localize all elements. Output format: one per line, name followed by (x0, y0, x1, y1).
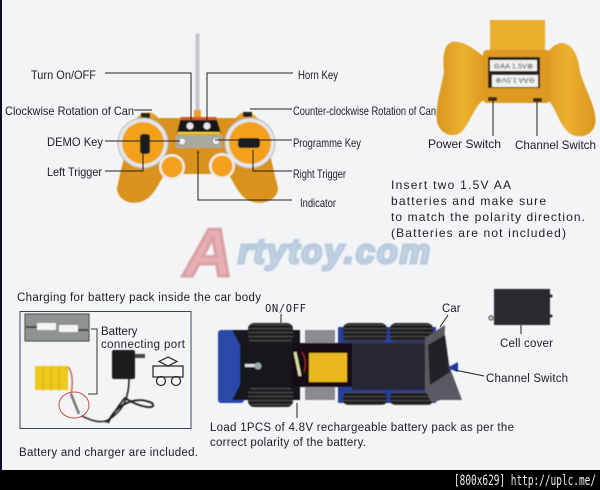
label: car: Car (442, 303, 461, 315)
black key panel (177, 117, 221, 133)
left knob (159, 154, 185, 180)
left stick (118, 118, 168, 168)
panel: charging (20, 312, 191, 428)
label: turn on/off: Turn On/OFF (31, 68, 96, 82)
battery two (492, 75, 538, 87)
battery instruction text: batteries and make sure (391, 194, 546, 208)
cell cover leader line (520, 325, 522, 334)
label: channel switch rear: Channel Switch (515, 138, 596, 152)
label: channel switch: Channel Switch (486, 373, 568, 385)
right stick (225, 118, 275, 168)
rear wheels (343, 323, 387, 342)
battery load instruction (210, 422, 514, 449)
battery compartment (488, 57, 540, 88)
battery instruction text: to match the polarity direction. (391, 210, 585, 224)
right knob (209, 153, 235, 179)
controller shoulders (135, 112, 160, 125)
antenna (196, 34, 199, 114)
front controller illustration (117, 34, 278, 203)
charger and cable (82, 350, 153, 423)
controller labels (5, 68, 436, 210)
rear wedge (425, 325, 462, 403)
truck chassis illustration (218, 323, 462, 407)
indicator light (197, 151, 199, 153)
label: on/off: ON/OFF (265, 303, 306, 315)
battery load instruction: Load 1PCS of 4.8V rechargeable battery pack as per the (210, 422, 514, 434)
cell cover (489, 289, 552, 325)
label: counter-clockwise rotation: Counter-clockwise Rotation of Can (293, 104, 436, 118)
front wheels (248, 323, 293, 343)
cab blue (218, 330, 244, 403)
yellow battery in car (309, 353, 347, 382)
label: programme key: Programme Key (293, 136, 361, 150)
battery two: ⊖AA 1.5V⊕ (495, 76, 535, 85)
truck leader lines (281, 314, 484, 418)
channel knob (447, 362, 458, 372)
charging heading: Charging for battery pack inside the car body (17, 292, 261, 304)
label: horn key: Horn Key (298, 68, 338, 82)
port leader line (88, 329, 97, 394)
rear controller leader lines (493, 100, 537, 136)
watermark: rtytoy.com (238, 233, 430, 271)
battery connecting port label (101, 326, 186, 351)
bottom black bar (0, 470, 600, 490)
gray key panel (176, 135, 222, 148)
label: right trigger: Right Trigger (293, 167, 346, 181)
red circle (59, 392, 89, 418)
watermark (182, 215, 430, 291)
battery and charger note: Battery and charger are included. (19, 447, 198, 459)
label: indicator: Indicator (300, 196, 336, 210)
battery connecting port label: Battery (101, 326, 138, 338)
steering part (245, 364, 255, 367)
car symbol (153, 357, 183, 386)
battery instruction text: (Batteries are not included) (391, 226, 566, 240)
label: cell cover: Cell cover (500, 338, 553, 350)
dark plate (352, 343, 425, 390)
label: power switch: Power Switch (428, 137, 501, 151)
controller leader lines (105, 73, 293, 200)
battery load instruction: correct polarity of the battery. (210, 437, 366, 449)
battery cover flap (490, 20, 545, 56)
battery tray (292, 343, 352, 387)
rear grips (437, 42, 490, 135)
label: clockwise rotation: Clockwise Rotation of Can (5, 104, 134, 118)
label: left trigger: Left Trigger (47, 165, 102, 179)
battery connecting port label: connecting port (101, 339, 186, 351)
blue rear chassis (338, 327, 436, 403)
yellow battery pack (35, 366, 79, 414)
left edge (0, 0, 2, 470)
rear controller illustration (437, 20, 595, 136)
connector photo (25, 314, 89, 341)
label: demo key: DEMO Key (47, 135, 103, 149)
battery instruction text: Insert two 1.5V AA (391, 178, 511, 192)
watermark: A (182, 215, 233, 291)
battery instruction text (391, 178, 585, 240)
rear body (483, 50, 550, 103)
battery one (490, 60, 537, 71)
gray side parts (305, 330, 335, 348)
cab black (232, 330, 300, 400)
controller body and grips (117, 118, 278, 203)
battery one: ⊖AA 1.5V⊕ (494, 62, 533, 70)
rear switches (488, 97, 497, 101)
